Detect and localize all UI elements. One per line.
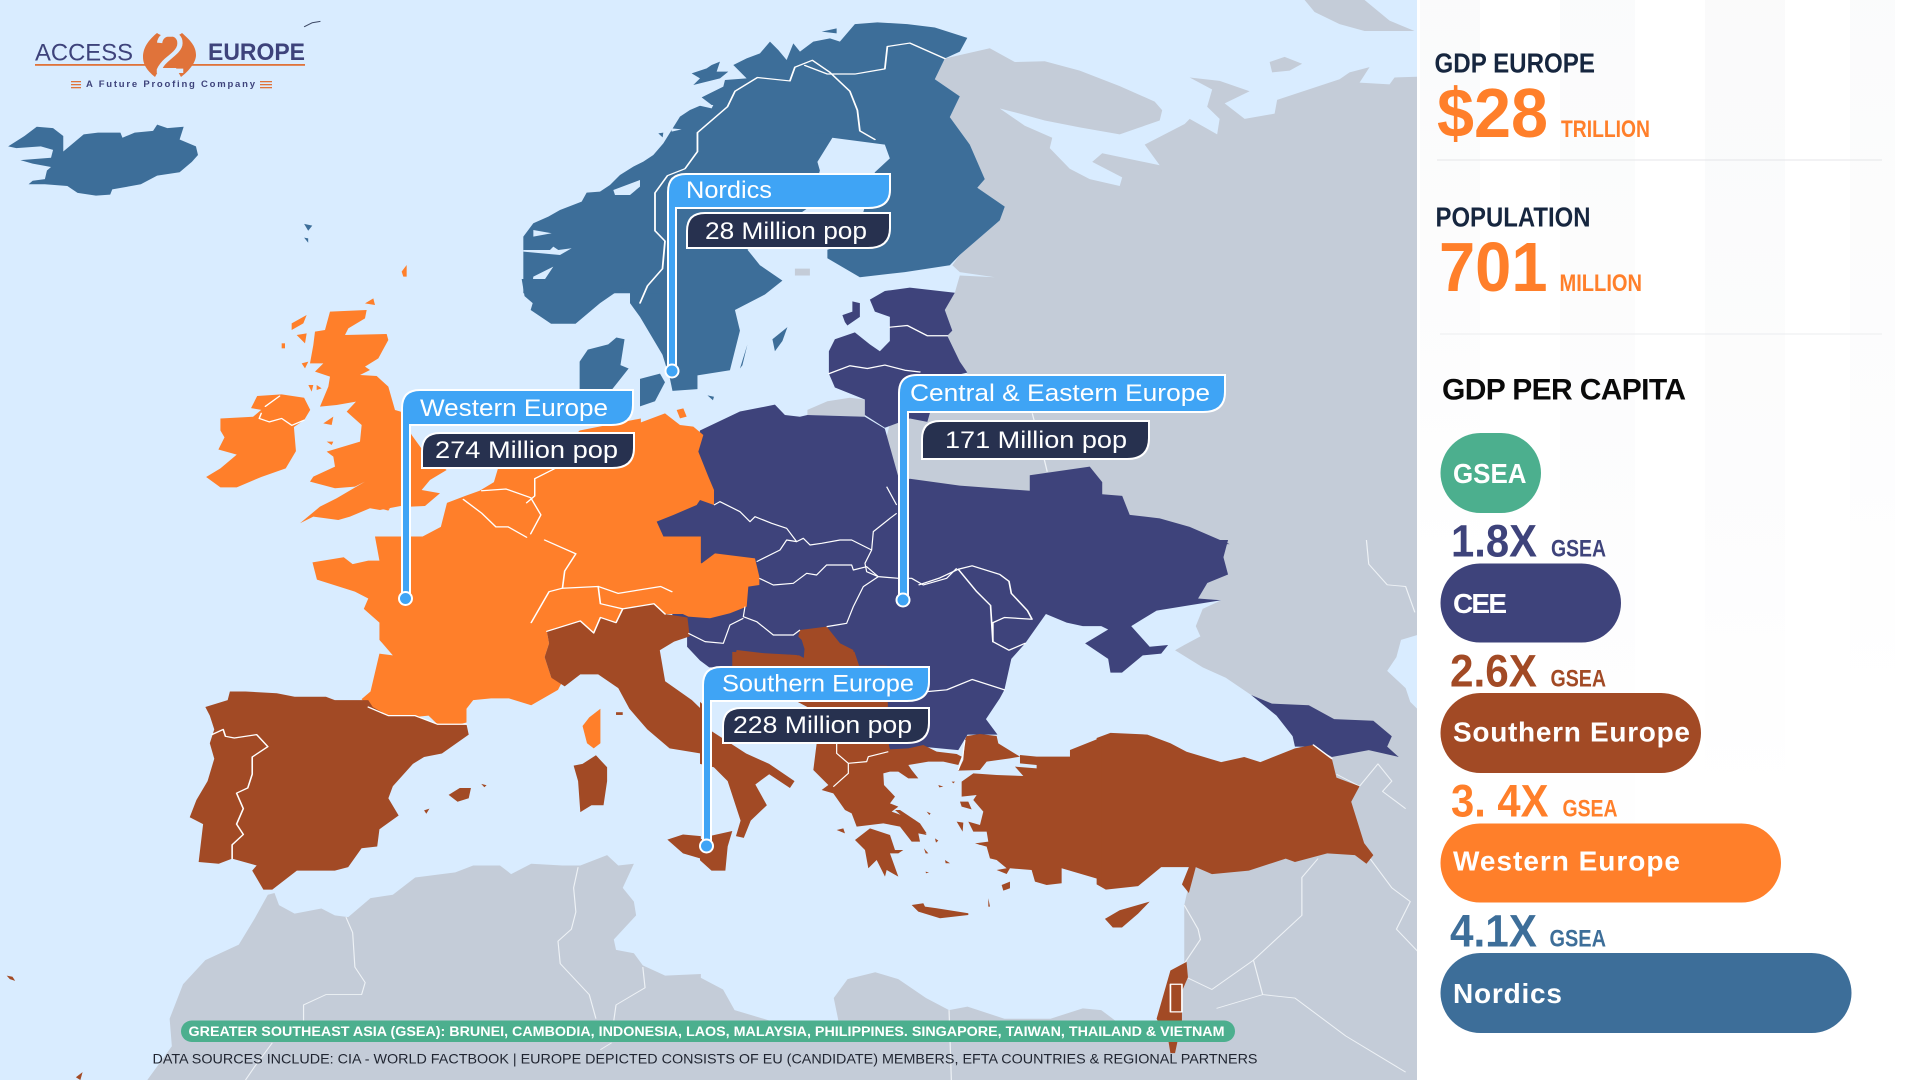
- callout: Nordics: [666, 174, 890, 378]
- bar: Western Europe: Western Europe: [1453, 846, 1680, 876]
- multiplier: 4.1X GSEA: 4.1X: [1450, 906, 1537, 956]
- map: border lines east and south: [949, 540, 1419, 1080]
- stat: population: 701: [1439, 228, 1548, 306]
- callout: Nordics: 28 Million pop: [705, 218, 867, 245]
- bar: CEE: [1440, 564, 1621, 642]
- callout: Western Europe: [399, 390, 634, 605]
- multiplier: 3.4X GSEA: 3. 4X: [1451, 776, 1548, 826]
- stat: GDP Europe: TRILLION: [1561, 116, 1650, 143]
- callout: Central and Eastern Europe: Central & Eastern Europe: [910, 380, 1210, 407]
- stat: population: POPULATION: [1436, 202, 1590, 232]
- callout: Central and Eastern Europe: 171 Million pop: [945, 427, 1127, 454]
- bar: CEE: CEE: [1453, 588, 1507, 619]
- stat: GDP Europe: $28: [1437, 74, 1548, 152]
- multiplier: 2.6X GSEA: GSEA: [1550, 666, 1606, 692]
- heading: GDP per capita: GDP PER CAPITA: [1442, 374, 1686, 406]
- callout: Southern Europe: Southern Europe: [722, 670, 914, 698]
- callout: Western Europe: 274 Million pop: [435, 437, 618, 464]
- stat: GDP Europe: [1434, 48, 1650, 152]
- callout: Southern Europe: 228 Million pop: [733, 712, 912, 739]
- callout: Nordics: Nordics: [686, 177, 772, 204]
- callout: Central and Eastern Europe: [896, 375, 1225, 606]
- stat: GDP Europe: GDP EUROPE: [1434, 48, 1595, 78]
- logo: Access 2 Europe: ACCESS: [35, 40, 133, 66]
- callout: Southern Europe: [700, 667, 929, 852]
- multiplier: 2.6X GSEA: 2.6X: [1450, 646, 1537, 696]
- map: Central and Eastern Europe region: [640, 288, 1399, 757]
- bar: GSEA: [1440, 433, 1541, 513]
- panel: right statistics sidebar: [1417, 0, 1928, 1080]
- logo: Access 2 Europe: A Future Proofing Company: [86, 79, 256, 90]
- footnote: data sources: DATA SOURCES INCLUDE: CIA - WORLD FACTBOOK | EUROPE DEPICTED CONSISTS OF EU (CANDIDATE) MEMBERS, EFTA COUNTRIES & REGIONAL PARTNERS: [152, 1050, 1258, 1066]
- map: internal country borders: [212, 43, 1332, 1012]
- multiplier: 1.8X GSEA: GSEA: [1551, 536, 1606, 562]
- bar: Southern Europe: [1440, 693, 1701, 773]
- logo: Access 2 Europe: 2: [154, 21, 186, 86]
- logo: Access 2 Europe: [35, 21, 305, 90]
- multiplier: 2.6X GSEA: [1450, 646, 1606, 696]
- multiplier: 4.1X GSEA: GSEA: [1550, 926, 1606, 952]
- footnote: GSEA definition banner: GREATER SOUTHEAST ASIA (GSEA): BRUNEI, CAMBODIA, INDONESIA, LAOS, MALAYSIA, PHILIPPINES. SINGAPORE, TAIWAN, THAILAND & VIETNAM: [188, 1024, 1224, 1039]
- multiplier: 1.8X GSEA: [1451, 516, 1606, 566]
- map: grey land borders: [246, 867, 645, 1080]
- bar: Nordics: [1440, 953, 1852, 1033]
- stat: population: MILLION: [1560, 270, 1642, 297]
- multiplier: 4.1X GSEA: [1450, 906, 1606, 956]
- bar: Nordics: Nordics: [1453, 978, 1562, 1009]
- multiplier: 3.4X GSEA: GSEA: [1562, 796, 1618, 822]
- multiplier: 1.8X GSEA: 1.8X: [1451, 516, 1537, 566]
- bar: Southern Europe: Southern Europe: [1453, 716, 1690, 748]
- bar: Western Europe: [1440, 824, 1781, 902]
- callout: Western Europe: Western Europe: [420, 395, 608, 422]
- bar: GSEA: GSEA: [1453, 458, 1526, 489]
- stat: population: [1436, 202, 1642, 306]
- map: Western Europe region: [206, 265, 759, 748]
- map: non-member land in grey: [147, 0, 1425, 1080]
- footnote: GSEA definition banner: [181, 1020, 1235, 1042]
- logo: Access 2 Europe: EUROPE: [208, 39, 305, 66]
- map: Southern Europe region: [7, 604, 1373, 1080]
- bar chart: GDP per capita by region: [1440, 433, 1852, 1033]
- multiplier: 3.4X GSEA: [1451, 776, 1618, 826]
- map: Nordics region: [8, 21, 1005, 406]
